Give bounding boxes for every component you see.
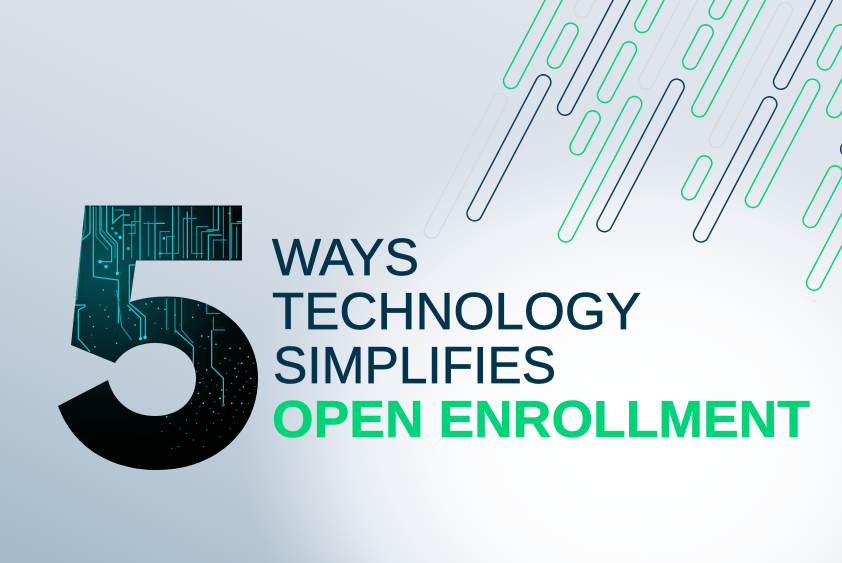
title line: WAYS: WAYS <box>272 229 419 287</box>
title line: OPEN ENROLLMENT: OPEN ENROLLMENT <box>272 391 810 449</box>
gray pills <box>422 0 795 241</box>
green pills <box>501 0 842 293</box>
title text <box>272 229 810 449</box>
large numeral 5 with circuit texture <box>58 206 258 470</box>
diagonal rounded line pattern <box>422 0 842 293</box>
scattered particles <box>90 290 251 417</box>
title line: SIMPLIFIES: SIMPLIFIES <box>273 337 556 395</box>
title line: TECHNOLOGY: TECHNOLOGY <box>272 283 641 341</box>
circuit nodes <box>98 212 230 407</box>
circuit board traces <box>75 205 255 448</box>
navy pills <box>464 0 842 245</box>
